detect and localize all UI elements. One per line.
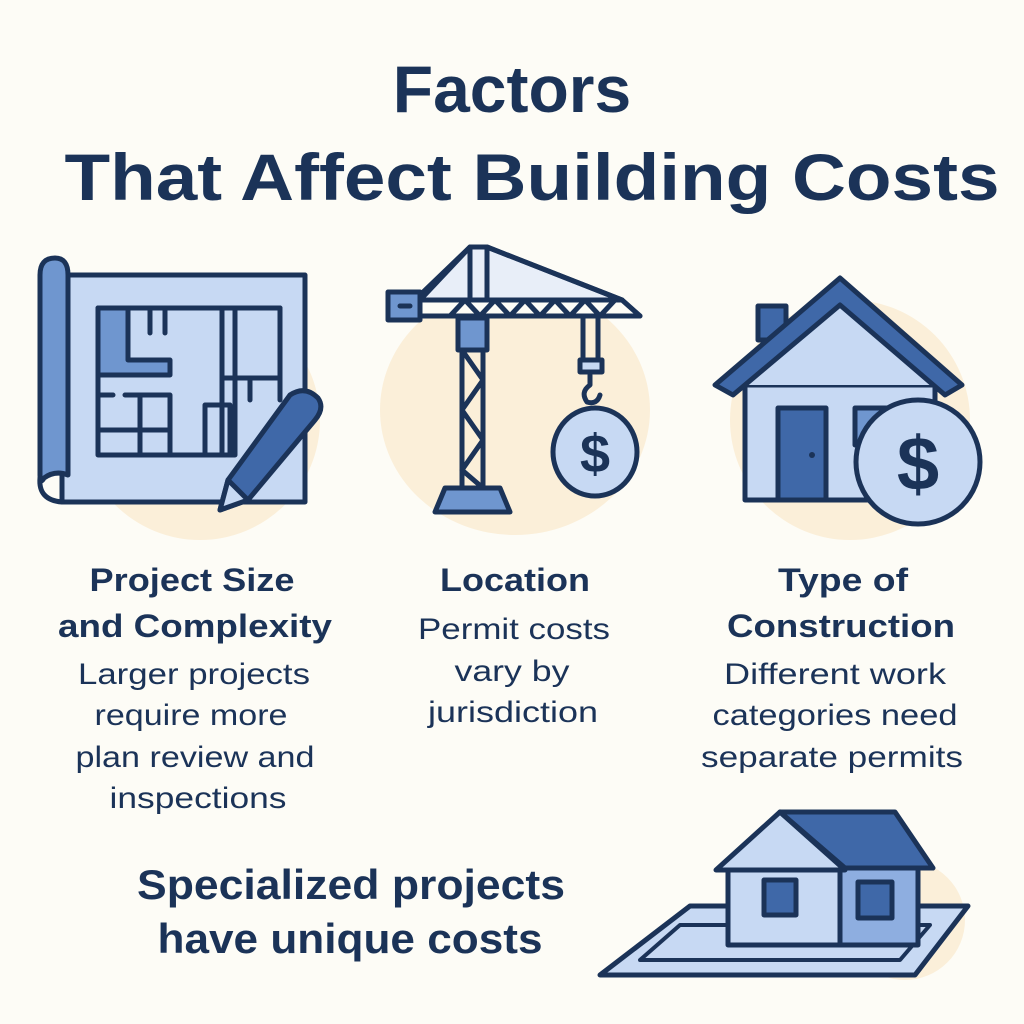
- text: type of construction: categories need: [712, 699, 958, 732]
- icon: crane with dollar coin: [380, 247, 650, 535]
- text: project size: [58, 562, 332, 815]
- text: project size: Project Size: [90, 562, 294, 598]
- text: project size: require more: [94, 699, 288, 732]
- title: That Affect Building Costs: [64, 140, 1000, 214]
- icon: blueprint with pencil: [40, 258, 321, 540]
- icon: house with dollar coin: [715, 278, 980, 540]
- text: specialized projects: have unique costs: [158, 915, 542, 962]
- text: location: Location: [440, 562, 590, 598]
- text: project size: plan review and: [76, 741, 314, 774]
- text: location: Permit costs: [418, 613, 610, 646]
- text: project size: and Complexity: [58, 608, 332, 644]
- text: type of construction: Construction: [727, 608, 955, 644]
- text: type of construction: [701, 562, 963, 774]
- text: type of construction: separate permits: [701, 741, 963, 774]
- text: location: jurisdiction: [427, 696, 598, 729]
- text: location: [418, 562, 610, 729]
- title: [64, 52, 1000, 214]
- icon: crane with dollar coin: $: [580, 424, 610, 484]
- title: Factors: [393, 52, 631, 126]
- text: type of construction: Different work: [724, 658, 947, 691]
- text: specialized projects: Specialized projects: [137, 861, 565, 908]
- text: project size: inspections: [110, 782, 286, 815]
- text: project size: Larger projects: [78, 658, 310, 691]
- icon: house with dollar coin: $: [897, 422, 939, 507]
- icon: house on plot: [600, 812, 968, 980]
- text: type of construction: Type of: [778, 562, 908, 598]
- text: location: vary by: [454, 655, 570, 688]
- text: specialized projects: [137, 861, 565, 962]
